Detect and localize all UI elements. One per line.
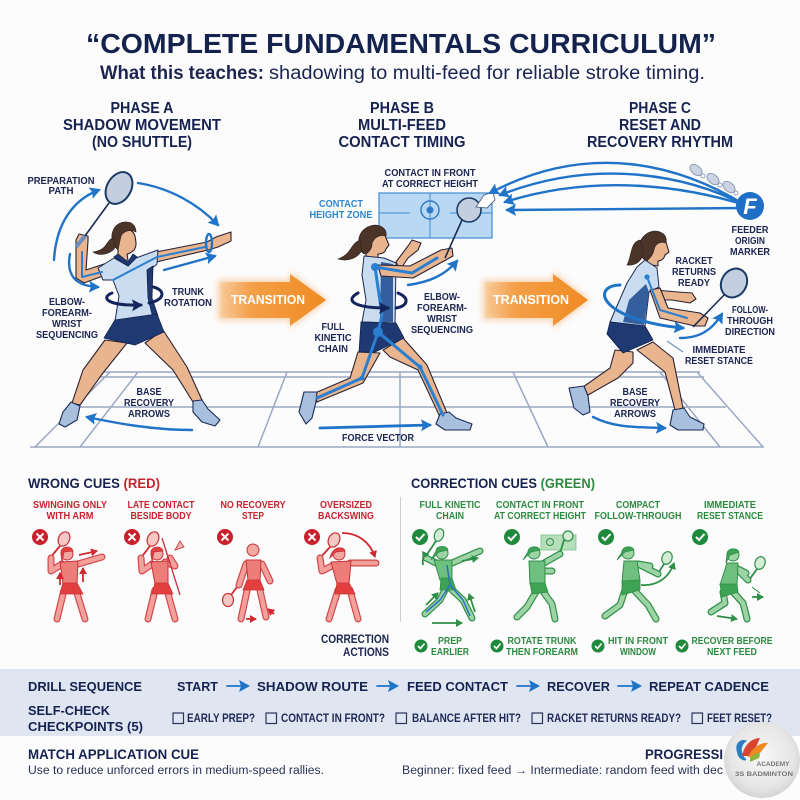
cue labels: correction: AT CORRECT HEIGHT [494, 511, 586, 522]
heading: phase C: PHASE C [629, 100, 691, 117]
figure: immediate reset stance [711, 549, 767, 619]
labels: phase B: CONTACT IN FRONT [384, 167, 476, 179]
figure: late contact beside body [140, 530, 184, 619]
title: “COMPLETE FUNDAMENTALS CURRICULUM” [86, 28, 716, 59]
label: correction actions: ACTIONS [343, 647, 389, 659]
logo: ACADEMY [756, 761, 790, 768]
progression [402, 747, 723, 777]
match application cue: Use to reduce unforced errors in medium-speed rallies. [28, 765, 324, 777]
cue labels: correction: FOLLOW-THROUGH [594, 511, 682, 522]
panel: wrong cues [28, 475, 389, 659]
cue labels: wrong: BACKSWING [318, 511, 374, 522]
self-check checkpoints: CHECKPOINTS (5) [28, 719, 143, 734]
correction action tips: PREP [438, 635, 462, 647]
figure: swinging only with arm [50, 530, 102, 619]
labels: phase B: FULL [322, 321, 345, 333]
icons: green check marks [412, 529, 708, 545]
self-check checkpoints: RACKET RETURNS READY? [547, 713, 681, 725]
heading: phase A [63, 100, 221, 151]
drill sequence: FEED CONTACT [407, 679, 508, 694]
panel: phase B [299, 100, 745, 444]
labels: phase C: RESET STANCE [685, 355, 753, 367]
labels: phase C: DIRECTION [725, 326, 775, 338]
arrows: feeds and force vector [320, 163, 745, 428]
arrows: preparation and swing path [54, 183, 218, 430]
arrow: transition B to C: TRANSITION [493, 293, 569, 307]
labels: phase B: FOREARM- [417, 302, 467, 314]
labels: phase C: RETURNS [672, 266, 716, 278]
labels: phase C: THROUGH [727, 315, 773, 327]
labels: phase B: ELBOW- [424, 291, 460, 303]
arrow: transition A to B [218, 272, 328, 328]
drill sequence: DRILL SEQUENCE [28, 679, 142, 694]
cue labels: correction: CHAIN [436, 511, 464, 522]
correction action tips: NEXT FEED [707, 646, 757, 658]
heading: phase C: RECOVERY RHYTHM [587, 134, 733, 151]
logo: 3S BADMINTON [735, 771, 793, 778]
cue labels: wrong: STEP [242, 511, 264, 522]
heading: phase B: PHASE B [370, 100, 434, 117]
cue labels: correction: RESET STANCE [697, 511, 763, 522]
progression: PROGRESSI [645, 747, 723, 762]
labels: phase A: SEQUENCING [36, 329, 98, 341]
subtitle: shadowing to multi-feed for reliable stroke timing. [269, 63, 705, 84]
drill sequence: START [177, 679, 218, 694]
heading: phase B [338, 100, 466, 151]
figure: shadow movement player [59, 167, 231, 427]
labels: phase B: FORCE VECTOR [342, 432, 414, 444]
labels: phase C: FEEDER [732, 224, 769, 236]
labels: phase A: PATH [48, 185, 74, 197]
labels: phase B: WRIST [427, 313, 458, 325]
self-check checkpoints [28, 703, 772, 734]
heading: wrong cues: WRONG CUES (RED) [28, 475, 160, 491]
labels: phase A: ELBOW- [49, 296, 85, 308]
drill sequence [28, 679, 769, 694]
labels: phase A: WRIST [52, 318, 83, 330]
correction action tips: THEN FOREARM [506, 646, 578, 658]
cue labels: correction: CONTACT IN FRONT [496, 500, 584, 511]
figure: oversized backswing [320, 531, 376, 619]
cue labels: wrong: NO RECOVERY [220, 500, 286, 511]
figure: contact in front [517, 531, 576, 619]
self-check checkpoints: CONTACT IN FRONT? [281, 713, 385, 725]
panel: correction cues [411, 475, 772, 658]
labels: phase B: HEIGHT ZONE [310, 209, 372, 221]
heading: correction cues: CORRECTION CUES (GREEN) [411, 475, 595, 491]
match application cue [28, 747, 324, 777]
match application cue: MATCH APPLICATION CUE [28, 747, 199, 762]
label: correction actions: CORRECTION [321, 634, 389, 646]
correction action tips: RECOVER BEFORE [692, 635, 772, 647]
labels: phase C: READY [678, 277, 710, 289]
labels: phase C: RACKET [676, 255, 713, 267]
heading: phase C [587, 100, 733, 151]
labels: phase A: ROTATION [164, 297, 212, 309]
labels: phase C: ARROWS [614, 408, 656, 420]
labels: phase B [310, 167, 479, 444]
labels: phase A: RECOVERY [124, 397, 174, 409]
self-check checkpoints: FEET RESET? [707, 713, 772, 725]
labels: phase A: FOREARM- [42, 307, 92, 319]
figure: recovery player [569, 231, 752, 430]
labels: phase C: ORIGIN [735, 235, 765, 247]
arrow: transition B to C [483, 272, 590, 328]
labels: phase C [610, 224, 775, 420]
cue labels: wrong: BESIDE BODY [130, 511, 192, 522]
correction action tips [414, 635, 772, 658]
labels: phase C: FOLLOW- [732, 304, 768, 316]
correction action tips: EARLIER [431, 646, 469, 658]
cue labels: wrong: SWINGING ONLY [33, 500, 107, 511]
heading: phase A: (NO SHUTTLE) [92, 134, 192, 151]
figure: compact follow-through [605, 547, 674, 619]
figure: full kinetic chain [423, 527, 480, 623]
labels: phase B: SEQUENCING [411, 324, 473, 336]
panel: drill sequence and self-check band [0, 669, 800, 736]
labels: phase A: ARROWS [128, 408, 170, 420]
drill sequence: RECOVER [547, 679, 611, 694]
divider [400, 497, 402, 622]
cue labels: wrong: LATE CONTACT [128, 500, 194, 511]
figure: multi-feed player [299, 192, 495, 430]
label: correction actions [321, 634, 389, 659]
feeder origin marker [736, 192, 764, 220]
heading: phase B: CONTACT TIMING [338, 134, 466, 151]
cue labels: wrong: WITH ARM [46, 511, 94, 522]
cue labels: correction: FULL KINETIC [420, 500, 480, 511]
labels: phase C: RECOVERY [610, 397, 660, 409]
labels: phase B: CHAIN [318, 343, 348, 355]
logo [724, 722, 800, 798]
drill sequence: SHADOW ROUTE [257, 679, 368, 694]
labels: phase C: BASE [622, 386, 648, 398]
correction action tips: HIT IN FRONT [608, 635, 668, 647]
contact height zone [379, 193, 492, 238]
arrow: transition A to B: TRANSITION [231, 293, 305, 307]
panel: phase A [28, 100, 231, 430]
labels: phase A: BASE [136, 386, 162, 398]
heading: phase C: RESET AND [619, 117, 701, 134]
labels: phase C: IMMEDIATE [692, 344, 746, 356]
cue labels: correction [420, 500, 763, 522]
labels: phase A [28, 175, 212, 420]
labels: phase A: PREPARATION [28, 175, 94, 187]
drill sequence: REPEAT CADENCE [649, 679, 769, 694]
panel: phase C [569, 100, 775, 430]
labels: phase C: MARKER [730, 246, 770, 258]
cue labels: wrong: OVERSIZED [320, 500, 372, 511]
correction action tips: ROTATE TRUNK [508, 635, 577, 647]
cue labels: correction: IMMEDIATE [704, 500, 756, 511]
icon: shuttles [688, 162, 738, 195]
self-check checkpoints: BALANCE AFTER HIT? [412, 713, 521, 725]
feeder origin marker: F [743, 194, 757, 219]
correction action tips: WINDOW [620, 646, 656, 658]
subtitle: What this teaches: [100, 63, 264, 84]
labels: phase B: KINETIC [314, 332, 352, 344]
self-check checkpoints: SELF-CHECK [28, 703, 111, 718]
heading: phase B: MULTI-FEED [358, 117, 446, 134]
court floor [30, 372, 764, 447]
labels: phase A: TRUNK [172, 286, 204, 298]
heading: phase A: SHADOW MOVEMENT [63, 117, 221, 134]
subtitle [100, 63, 705, 84]
heading: phase A: PHASE A [110, 100, 174, 117]
labels: phase B: AT CORRECT HEIGHT [382, 178, 479, 190]
figure: no recovery step [222, 544, 274, 619]
progression: Beginner: fixed feed → Intermediate: random feed with dec [402, 765, 723, 777]
cue labels: correction: COMPACT [616, 500, 660, 511]
labels: phase B: CONTACT [319, 198, 364, 210]
arrows: recovery paths [593, 285, 722, 428]
cue labels: wrong [33, 500, 374, 522]
self-check checkpoints: EARLY PREP? [187, 713, 255, 725]
icons: red X marks [32, 529, 320, 545]
